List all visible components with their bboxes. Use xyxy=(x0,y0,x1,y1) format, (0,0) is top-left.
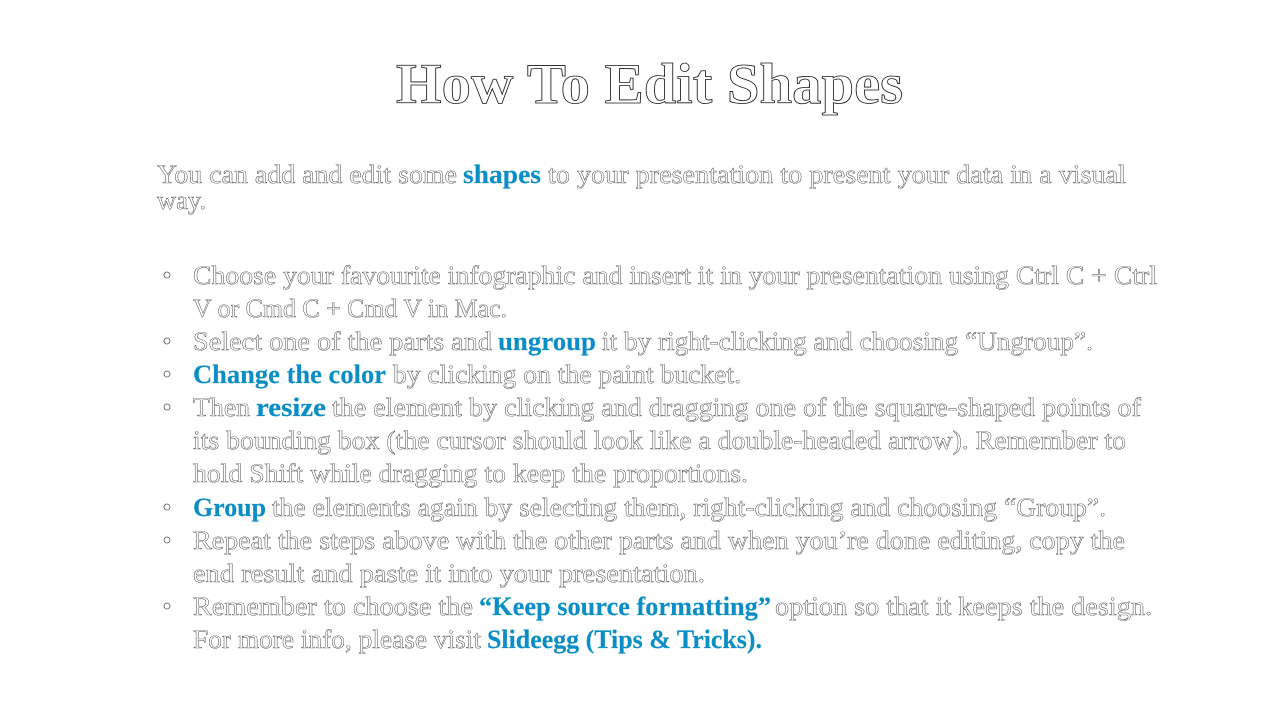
bullet 2: ungroup xyxy=(164,327,1093,356)
bullet 1: choose infographic xyxy=(164,261,1157,323)
title: How To Edit Shapes xyxy=(396,53,903,116)
bullet 2: ungroup: ungroup xyxy=(498,327,596,356)
bullet 4: resize xyxy=(164,393,1141,488)
text block: introduction: way. xyxy=(157,186,206,215)
bullet 5: group: Group xyxy=(193,493,266,522)
bullet 3: change the color: Change the color xyxy=(193,360,386,389)
bullet 6: repeat xyxy=(164,526,1125,588)
bullet 2: ungroup: it by right-clicking and choosing “Ungroup”. xyxy=(602,327,1093,356)
bullet 3: change the color xyxy=(164,360,741,389)
bullet 1: choose infographic: V or Cmd C + Cmd V in Mac. xyxy=(193,294,507,323)
bullet 1: choose infographic: Choose your favourite infographic and insert it in your presentation using Ctrl C + Ctrl xyxy=(193,261,1157,290)
bullet 3: change the color: by clicking on the paint bucket. xyxy=(393,360,741,389)
bullet 4: resize: resize xyxy=(256,393,326,422)
bullet 7: keep source formatting: For more info, please visit xyxy=(193,625,482,654)
bullet 4: resize: the element by clicking and dragging one of the square-shaped points of xyxy=(332,393,1141,422)
bullet 7: keep source formatting: Slideegg (Tips & Tricks). xyxy=(487,625,762,654)
bullet 4: resize: Then xyxy=(193,393,250,422)
bullet 7: keep source formatting: “Keep source formatting” xyxy=(479,592,771,621)
text block: introduction: to your presentation to present your data in a visual xyxy=(548,160,1126,189)
bullet 4: resize: hold Shift while dragging to keep the proportions. xyxy=(193,459,748,488)
bullet 5: group: the elements again by selecting them, right-clicking and choosing “Group”. xyxy=(272,493,1106,522)
bullet 4: resize: its bounding box (the cursor should look like a double-headed arrow). Remember to xyxy=(193,426,1126,455)
text block: introduction: shapes xyxy=(463,160,541,189)
bullet 6: repeat: Repeat the steps above with the other parts and when you’re done editing, copy the xyxy=(193,526,1125,555)
bullet 7: keep source formatting: option so that it keeps the design. xyxy=(775,592,1152,621)
bullet 7: keep source formatting: Remember to choose the xyxy=(193,592,473,621)
bullet 6: repeat: end result and paste it into your presentation. xyxy=(193,559,705,588)
text block: introduction: You can add and edit some xyxy=(157,160,457,189)
text block: introduction xyxy=(157,160,1126,215)
bullet 2: ungroup: Select one of the parts and xyxy=(193,327,492,356)
bullet 7: keep source formatting xyxy=(164,592,1152,654)
bullet list xyxy=(164,261,1157,654)
